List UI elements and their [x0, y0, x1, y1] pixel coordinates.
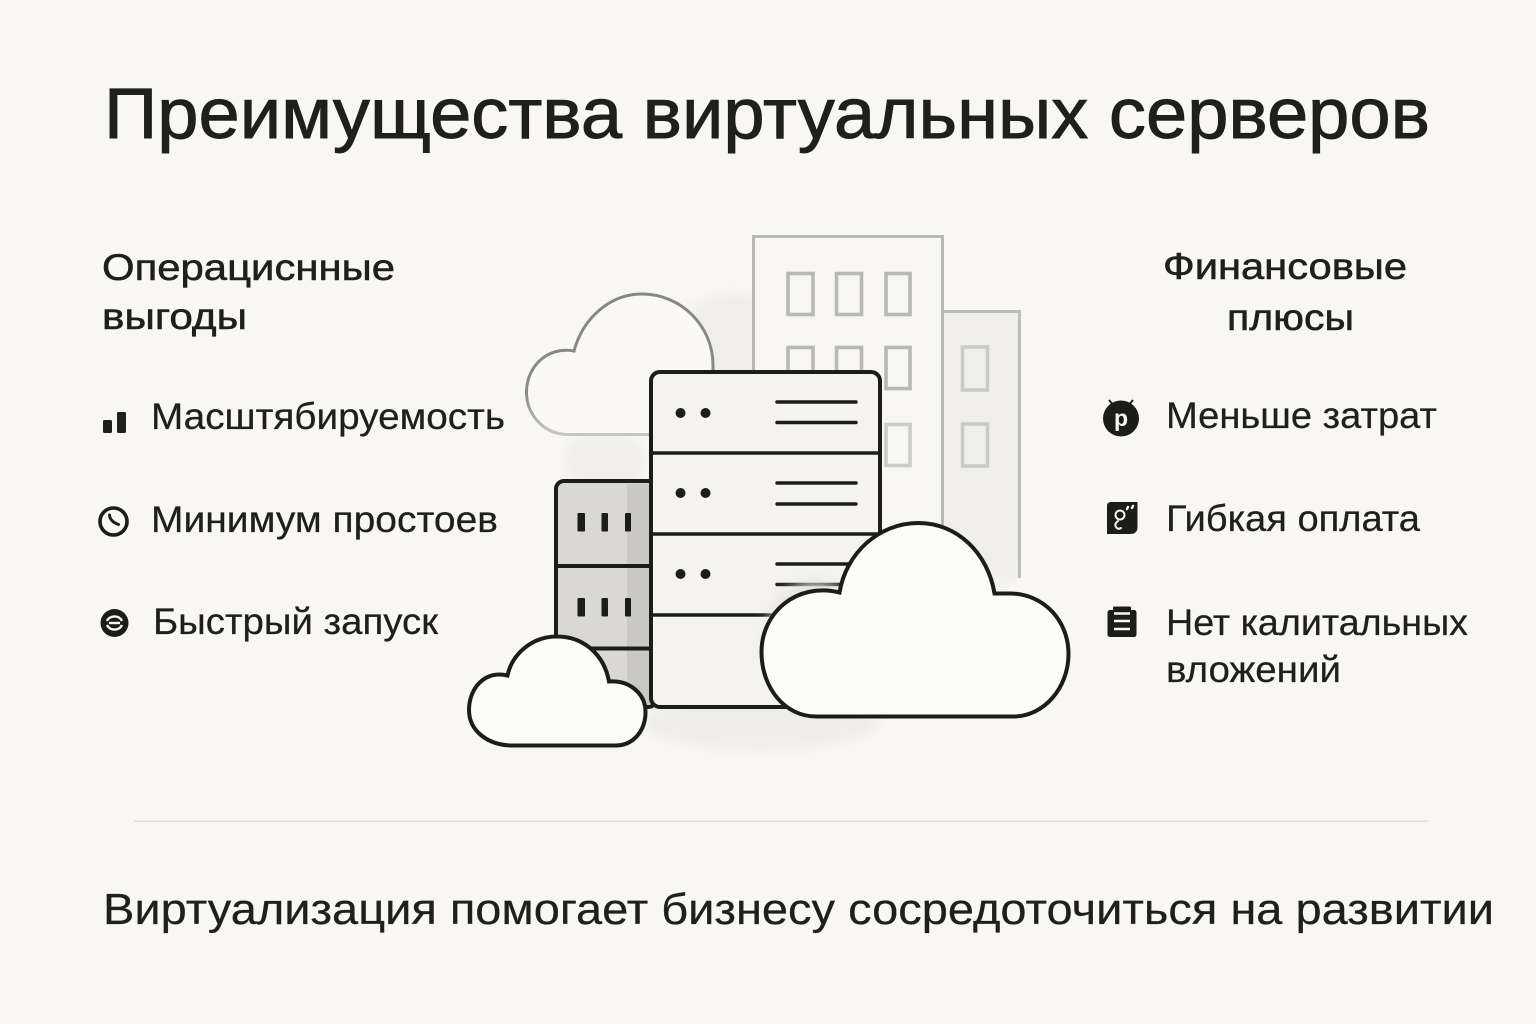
list item: no capital investment [1108, 602, 1469, 690]
title: Преимущества виртуальных серверов [104, 75, 1430, 154]
cloud: rear [526, 294, 713, 434]
soft background shadows [563, 292, 880, 750]
heading: operational benefits: выгоды [102, 296, 247, 337]
panel: financial advantages [1103, 246, 1469, 690]
server rack: small left [556, 481, 656, 707]
illustration: servers, clouds and buildings [469, 236, 1068, 750]
list item: flexible payment: Гибкая оплата [1166, 498, 1420, 539]
icon: bars [103, 412, 126, 433]
cloud: large front [762, 523, 1068, 716]
building: small rear [943, 312, 1020, 600]
cloud: small front [469, 636, 646, 746]
heading: financial advantages: Финансовые [1163, 246, 1407, 287]
footer statement: Виртуализация помогает бизнесу сосредоточиться на развитии [103, 885, 1494, 934]
soft shadow behind front cloud [767, 582, 863, 698]
panel: operational benefits [100, 247, 505, 642]
icon: refresh circle [100, 609, 128, 637]
list item: no capital investment: Нет калитальных [1166, 602, 1469, 643]
list item: lower costs: Меньше затрат [1166, 395, 1437, 436]
list item: fast launch: Быстрый запуск [153, 601, 439, 642]
building: large rear [754, 236, 942, 536]
icon: p badge [1103, 400, 1139, 436]
server rack: main [651, 372, 880, 707]
list item: scalability: Масштябируемость [151, 396, 505, 437]
list item: no capital investment: вложений [1166, 649, 1341, 690]
icon: p badge: p [1114, 405, 1128, 431]
icon: flexible payment square [1107, 502, 1138, 534]
list item: minimal downtime: Минимум простоев [151, 499, 498, 540]
icon: clipboard [1108, 606, 1136, 637]
heading: operational benefits [102, 247, 395, 337]
heading: financial advantages: плюсы [1227, 297, 1354, 338]
heading: operational benefits: Операциснные [102, 247, 395, 288]
icon: clock [100, 508, 127, 535]
heading: financial advantages [1163, 246, 1407, 338]
